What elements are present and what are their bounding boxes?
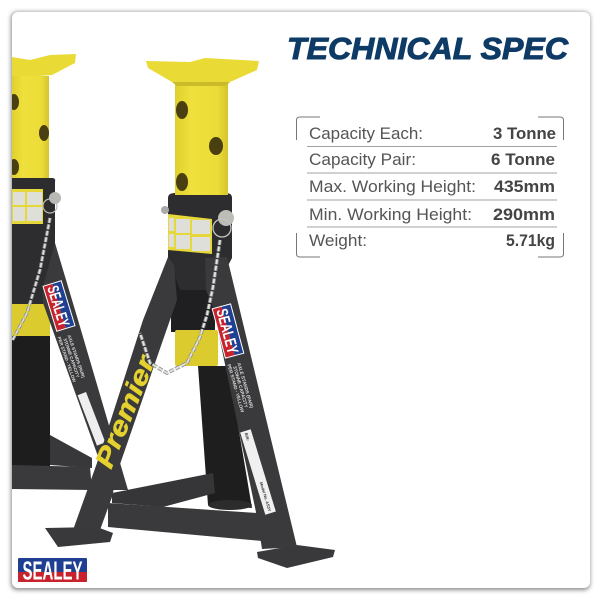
- left stand sealey badge: SEALEY: [43, 284, 72, 329]
- title: TECHNICAL SPEC: [287, 31, 569, 66]
- pictogram label: [168, 214, 212, 254]
- row: weight: 5.71kg: [506, 232, 555, 250]
- row: capacity pair: 6 Tonne: [491, 151, 555, 169]
- table brackets: [296, 117, 564, 257]
- left leg label text: [58, 336, 85, 382]
- sealey leg badge: SEALEY: [212, 307, 241, 356]
- holes: [176, 101, 223, 191]
- left stand (cropped): [9, 54, 128, 490]
- row: capacity each: Capacity Each:: [309, 125, 423, 143]
- row: capacity pair: Capacity Pair:: [309, 151, 416, 169]
- front leg: [73, 257, 177, 530]
- leg label text: AXLE STANDS (PAIR): [236, 362, 254, 409]
- row: capacity pair: [309, 151, 555, 169]
- row: min working height: [309, 206, 555, 224]
- leg label text: 3TONNE CAPACITY: [232, 366, 249, 408]
- row: max working height: Max. Working Height:: [309, 178, 476, 196]
- row: min working height: Min. Working Height:: [309, 206, 472, 224]
- feet: [45, 527, 335, 568]
- sealey logo: [18, 556, 87, 586]
- row: capacity each: [309, 125, 556, 143]
- left leg label text: AXLE STANDS (PAIR): [67, 334, 86, 379]
- row: max working height: [309, 178, 555, 196]
- left stand sealey badge: [42, 280, 76, 332]
- locking pin: [161, 206, 234, 237]
- row: weight: [309, 232, 555, 250]
- model number plate: [240, 429, 276, 515]
- row: max working height: 435mm: [494, 178, 555, 196]
- tube: [175, 80, 228, 195]
- chain: [140, 240, 220, 373]
- collar and yoke: [168, 193, 232, 290]
- sealey logo: SEALEY: [22, 556, 82, 586]
- row: weight: Weight:: [309, 232, 367, 250]
- row: capacity each: 3 Tonne: [493, 125, 556, 143]
- cross bars: [108, 473, 262, 541]
- premier text: Premier: [89, 349, 162, 472]
- rear leg and yellow sleeve: [171, 258, 252, 510]
- spec table: [296, 117, 564, 257]
- model number plate: B/N:: [244, 432, 251, 441]
- top plate: [146, 58, 259, 86]
- right stand: [45, 58, 335, 568]
- row: min working height: 290mm: [493, 206, 555, 224]
- right leg: [205, 257, 297, 549]
- leg label text: [228, 363, 254, 412]
- left leg label text: PER STAND - YELLOW: [57, 336, 77, 384]
- left leg label text: 3TONNE CAPACITY: [62, 338, 81, 378]
- leg label text: PER STAND - YELLOW: [226, 364, 245, 414]
- model number plate: Model No. AS3Y: [259, 481, 272, 512]
- product photo: axle stands: [9, 54, 335, 568]
